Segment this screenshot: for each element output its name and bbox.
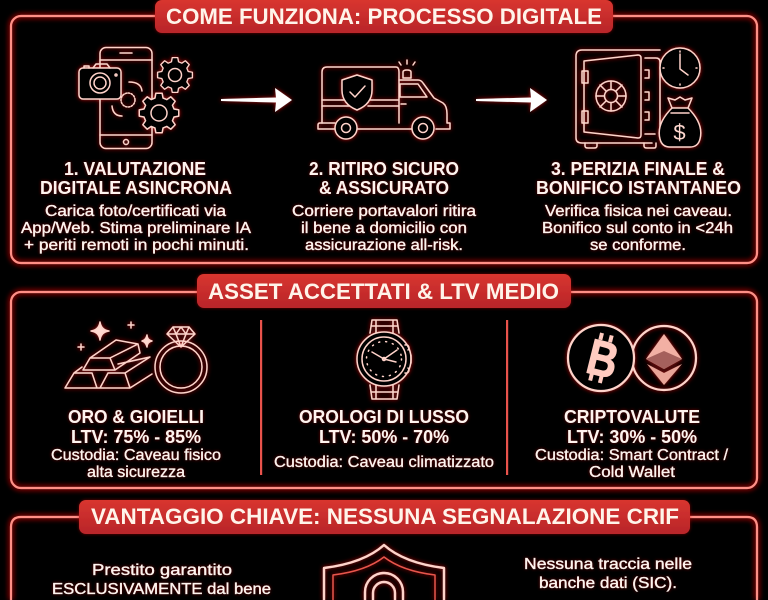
column divider 1: [260, 320, 262, 475]
heading tag: [79, 500, 690, 534]
heading tag: VANTAGGIO CHIAVE: NESSUNA SEGNALAZIONE CRIF: [91, 504, 679, 529]
step 3: [536, 159, 741, 254]
icon: bitcoin and ethereum: B: [581, 328, 624, 390]
step 2: il bene a domicilio con: [301, 220, 467, 237]
heading tag: [197, 274, 571, 308]
asset 3 text: Cold Wallet: [589, 464, 676, 481]
right text: Nessuna traccia nelle: [524, 556, 692, 573]
step 3: Bonifico sul conto in <24h: [542, 220, 733, 237]
asset 1 text: alta sicurezza: [87, 464, 185, 481]
step 2: & ASSICURATO: [319, 178, 449, 198]
icon: luxury watch: [357, 320, 411, 399]
icon: safe, clock and money bag: $: [673, 120, 686, 145]
asset 1 text: ORO & GIOIELLI: [68, 407, 204, 427]
asset 1 text: [51, 407, 221, 481]
asset 2 text: OROLOGI DI LUSSO: [299, 407, 469, 427]
asset 1 text: LTV: 75% - 85%: [71, 427, 201, 447]
heading tag: ASSET ACCETTATI & LTV MEDIO: [208, 279, 559, 304]
asset 3 text: CRIPTOVALUTE: [564, 407, 700, 427]
asset 2 text: Custodia: Caveau climatizzato: [274, 454, 494, 471]
step 1: [21, 159, 251, 254]
panel frame: [11, 16, 757, 263]
panel: asset accettati: [11, 274, 757, 488]
icon: safe, clock and money bag: [576, 48, 701, 148]
step 3: se conforme.: [590, 237, 686, 254]
step 1: App/Web. Stima preliminare IA: [21, 220, 251, 237]
left text: Prestito garantito: [92, 562, 232, 579]
right text: banche dati (SIC).: [539, 575, 677, 592]
asset 3 text: LTV: 30% - 50%: [567, 427, 697, 447]
step 2: Corriere portavalori ritira: [292, 203, 476, 220]
left text: [52, 562, 271, 598]
asset 3 text: [535, 407, 729, 481]
step 1: 1. VALUTAZIONE: [64, 159, 206, 179]
column divider 2: [506, 320, 508, 475]
step 1: + periti remoti in pochi minuti.: [24, 237, 249, 254]
asset 3 text: Custodia: Smart Contract /: [535, 447, 729, 464]
panel frame: [11, 517, 757, 600]
panel: come funziona: [11, 0, 757, 263]
arrow 1: [221, 88, 292, 112]
icon: phone, camera and gears: [79, 48, 192, 148]
asset 2 text: LTV: 50% - 70%: [319, 427, 449, 447]
step 3: 3. PERIZIA FINALE &: [551, 159, 725, 179]
step 2: assicurazione all-risk.: [305, 237, 463, 254]
step 3: Verifica fisica nei caveau.: [545, 203, 732, 220]
step 2: 2. RITIRO SICURO: [309, 159, 459, 179]
asset 2 text: [274, 407, 494, 471]
panel: vantaggio chiave: [11, 500, 757, 600]
arrow 2: [476, 88, 547, 112]
heading tag: COME FUNZIONA: PROCESSO DIGITALE: [166, 4, 602, 29]
right text: [524, 556, 692, 592]
asset 1 text: Custodia: Caveau fisico: [51, 447, 221, 464]
panel frame: [11, 292, 757, 488]
left text: ESCLUSIVAMENTE dal bene: [52, 581, 271, 598]
icon: bitcoin and ethereum: [568, 325, 696, 391]
icon: gold bars and ring: [65, 322, 207, 393]
step 1: Carica foto/certificati via: [45, 203, 226, 220]
icon: armoured van: [318, 60, 450, 139]
step 3: BONIFICO ISTANTANEO: [536, 178, 741, 198]
step 2: [292, 159, 476, 254]
icon: shield with lock: [324, 545, 444, 600]
step 1: DIGITALE ASINCRONA: [40, 178, 232, 198]
